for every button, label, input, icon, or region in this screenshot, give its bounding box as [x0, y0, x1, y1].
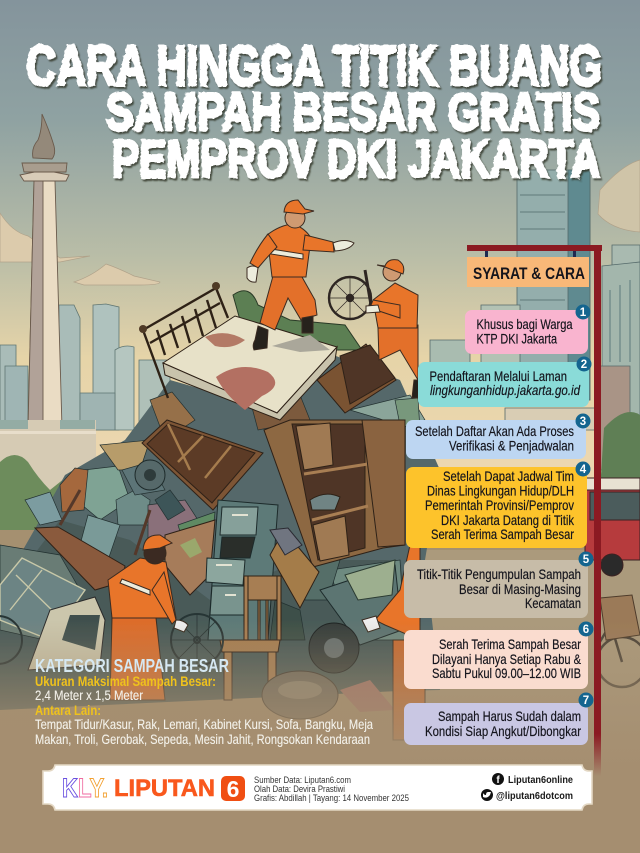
bicycle wheel top	[329, 270, 371, 319]
step 3: Verifikasi & Penjadwalan	[449, 438, 574, 454]
rubble	[0, 392, 425, 640]
step 4	[406, 462, 590, 548]
step 6: 6	[583, 624, 589, 636]
step 4: Dinas Lingkungan Hidup/DLH	[427, 482, 574, 498]
ground	[0, 530, 640, 853]
step 7: Sampah Harus Sudah dalam	[438, 708, 581, 724]
logo: Liputan 6: 6	[227, 776, 239, 802]
step 7	[404, 692, 594, 745]
pile base	[0, 350, 440, 700]
step 4: Serah Terima Sampah Besar	[431, 526, 574, 542]
step 5: Titik-Titik Pengumpulan Sampah	[417, 566, 581, 582]
step 5: Kecamatan	[525, 595, 581, 611]
step 7: 7	[583, 695, 589, 707]
logo: KLY: KLY.	[62, 773, 108, 803]
step 4: DKI Jakarta Datang di Titik	[441, 512, 575, 528]
step 6: Dilayani Hanya Setiap Rabu &	[432, 651, 582, 667]
step 2: lingkunganhidup.jakarta.go.id	[430, 382, 581, 398]
right skyscrapers	[430, 170, 640, 470]
worker top right	[366, 260, 419, 398]
step 1	[465, 304, 590, 354]
heading: syarat & cara: SYARAT & CARA	[473, 264, 585, 283]
trees	[0, 455, 120, 550]
category text block: Tempat Tidur/Kasur, Rak, Lemari, Kabinet Kursi, Sofa, Bangku, Meja	[35, 716, 373, 732]
credits	[254, 775, 409, 803]
step 1: Khusus bagi Warga	[476, 316, 573, 332]
footer bar	[43, 765, 592, 810]
signpost	[467, 245, 602, 776]
bush on pile	[233, 291, 362, 350]
category text block: Ukuran Maksimal Sampah Besar:	[35, 673, 216, 689]
step 5: 5	[583, 554, 590, 566]
bed frame	[143, 288, 228, 398]
step 1: KTP DKI Jakarta	[476, 330, 557, 346]
social accounts: f	[496, 775, 500, 786]
car frame and tyres	[320, 565, 402, 645]
social accounts: Liputan6online	[508, 775, 573, 786]
wardrobe	[264, 420, 405, 567]
filing cabinet	[206, 500, 278, 640]
category text block: KATEGORI SAMPAH BESAR	[35, 656, 229, 676]
shelf tilted	[142, 420, 263, 510]
credits: Olah Data: Devira Prastiwi	[254, 784, 345, 794]
step 4: 4	[580, 464, 587, 476]
red bus	[585, 478, 640, 576]
chair	[220, 576, 281, 700]
worker lower left	[108, 535, 188, 700]
title	[26, 34, 602, 189]
step 7: Kondisi Siap Angkut/Dibongkar	[425, 723, 581, 739]
step 4: Setelah Dapat Jadwal Tim	[443, 468, 574, 484]
worker lower right arm	[362, 545, 425, 740]
worker top	[247, 200, 354, 350]
monas monument	[20, 114, 69, 428]
category text block: Makan, Troli, Gerobak, Sepeda, Mesin Jahit, Rongsokan Kendaraan	[35, 731, 370, 747]
step 6	[404, 622, 594, 689]
credits: Grafis: Abdillah | Tayang: 14 November 2025	[254, 793, 409, 803]
clouds	[0, 160, 640, 285]
heading: syarat & cara	[467, 257, 589, 287]
mattress	[163, 316, 337, 420]
step 1: 1	[580, 307, 587, 319]
step 6: Sabtu Pukul 09.00–12.00 WIB	[432, 665, 581, 681]
window frame	[0, 558, 85, 640]
left skyscrapers	[0, 304, 170, 430]
ground fade overlay	[0, 620, 640, 770]
car door	[28, 597, 105, 670]
step 2	[418, 356, 592, 407]
step 6: Serah Terima Sampah Besar	[439, 636, 581, 652]
category text block: 2,4 Meter x 1,5 Meter	[35, 687, 143, 703]
building behind left tree	[0, 420, 96, 490]
broken table	[35, 527, 125, 590]
social accounts	[481, 773, 573, 802]
bicycle right	[595, 615, 640, 687]
bicycle wheel lower	[0, 614, 223, 666]
category text block	[35, 656, 373, 747]
step 3: 3	[580, 416, 586, 428]
logo: Liputan 6: LIPUTAN	[114, 775, 215, 802]
step 2: Pendaftaran Melalui Laman	[430, 368, 567, 384]
step 5: Besar di Masing-Masing	[459, 581, 581, 597]
crate right of mattress	[317, 344, 396, 413]
social accounts: @liputan6dotcom	[496, 791, 573, 802]
step 3	[406, 414, 590, 459]
step 3: Setelah Daftar Akan Ada Proses	[415, 423, 574, 439]
step 4: Pemerintah Provinsi/Pemprov	[425, 497, 574, 513]
step 5	[404, 552, 594, 618]
step 2: 2	[581, 359, 587, 371]
credits: Sumber Data: Liputan6.com	[254, 775, 351, 785]
category text block: Antara Lain:	[35, 702, 101, 718]
sack	[165, 520, 215, 595]
